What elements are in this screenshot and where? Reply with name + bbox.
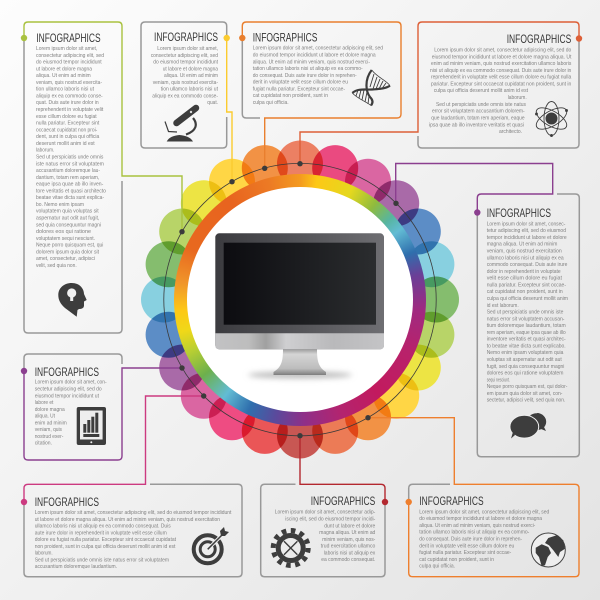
text block (35, 380, 107, 447)
text block: laborum. (35, 551, 53, 557)
monitor shadow (248, 372, 352, 378)
end dot: red-orange (576, 35, 582, 42)
panel: right purple (396, 164, 579, 457)
text block: do eiusmod tempor incididunt ut labore et dolore magna (419, 516, 543, 522)
text block: commodo consequat. Duis aute irure (487, 262, 568, 268)
text block: cat cupidatat non proident, sunt in (419, 557, 494, 563)
text block: to beatae vitae dicta sunt explicabo. (487, 343, 566, 349)
text block: architecto. (499, 129, 522, 135)
end dot: purple (474, 209, 480, 216)
text block: voluptas sit aspernatur aut odit aut (487, 357, 562, 363)
text block: pariatur. Excepteur sint occaecat cupidatat non proident, sunt in (431, 81, 571, 87)
rainbow ring (174, 174, 426, 426)
text block: tempor incididunt ut labore et dolore (487, 235, 567, 241)
text block: quat. (207, 100, 218, 106)
monitor (215, 233, 384, 378)
connector: green (24, 22, 182, 232)
connector: orange (242, 22, 401, 168)
icon: microscope (165, 108, 196, 142)
text block: tation ullamco laboris nisi ut aliquip ex ea commo- (419, 530, 529, 536)
text block (419, 509, 549, 570)
connector: purple (24, 368, 182, 460)
text block: amet, consectetur, adipisci (36, 256, 95, 262)
text block: derit in voluptate velit esse cillum dolore eu (419, 543, 514, 549)
text block: voluptatem quia voluptas sit (36, 209, 99, 215)
panel: bottom-right orange (368, 418, 579, 577)
text block: aliquip ex ea commodo conse- (36, 94, 103, 100)
panel: left purple tablet (21, 354, 182, 460)
text block: iste natus error sit voluptatem (36, 161, 104, 167)
text block: error sit voluptatem accusantium dolorem- (432, 109, 525, 115)
text block: dolores eos qui ratione voluptatem (487, 371, 563, 377)
text block (151, 46, 219, 106)
text block: esse cillum dolore eu fugiat (36, 114, 97, 120)
text block: aliqua. Ut enim ad minim veniam, quis nostrud exerci- (253, 59, 370, 65)
text block: aliqua. Ut enim ad minim veniam, quis nostrud exerci- (419, 523, 535, 529)
text block: Neque porro quisquam est, qui dolor- (487, 384, 567, 390)
heading: INFOGRAPHICS (487, 206, 551, 220)
text block: culpa qui officia. (253, 100, 289, 106)
text block: tion ullamco laboris nisi ut (36, 87, 94, 93)
text block: nisi ut aliquip ex ea commodo consequat. Duis aute irure dolor in (430, 68, 571, 74)
text block: aliqua. Ut (35, 414, 55, 420)
panel: DNA orange (239, 22, 401, 168)
text block: sed quia consequuntur magni (36, 222, 101, 228)
text block: minim veniam, quis nos- (322, 537, 375, 543)
text block: magna aliqua. Ut enim ad (319, 530, 375, 536)
text block: enim ad minim (35, 420, 67, 426)
text block: reprehenderit in voluptate velit esse cillum dolore eu fugiat nulla (431, 75, 572, 81)
text block: velit esse cillum dolore eu fugiat (487, 276, 562, 282)
connector nodes (179, 161, 399, 438)
text block: tetur adipiscing elit, sed do eiusmod (487, 228, 566, 234)
text block: voluptatem sequi nesciunt. (36, 236, 95, 242)
text block: trud exercitation ullamco (321, 544, 376, 550)
text block: natus error sit voluptatem accusan- (487, 316, 564, 322)
text block: eiusmod tempor incididunt ut (35, 393, 99, 399)
text block: Sed ut perspiciatis unde omnis iste natus error sit voluptatem (35, 558, 169, 564)
text block: do eiusmod tempor incididunt (153, 60, 218, 66)
text block: sectetur, adipisci velit, sed quia non. (487, 398, 566, 404)
text block: aliquip ex ea commodo conse- (152, 94, 218, 100)
text block: magna aliqua. Ut enim ad minim (487, 242, 557, 248)
monitor screen (224, 243, 376, 325)
end dot: orange (406, 499, 412, 505)
text block: eiusmod tempor incididunt ut labore et dolore magna aliqua. Ut (432, 54, 572, 60)
text block: sequi nesciunt. (487, 377, 510, 383)
text block: Lorem ipsum dolor sit amet, consec- (487, 221, 565, 227)
text block: Neque porro quisquam est, qui (36, 243, 103, 249)
text block: ipsa quae ab illo inventore veritatis et quasi (429, 122, 524, 128)
end dot: pink (21, 499, 27, 505)
text block: laborum. (36, 148, 55, 154)
text block: non proident, sunt in culpa qui officia deserunt mollit anim id est (35, 544, 176, 550)
text block: dolor in reprehenderit in voluptate (487, 269, 561, 275)
text block: nulla pariatur. Excepteur sint occae- (487, 282, 566, 288)
text block: ut labore et dolore magna (36, 66, 93, 72)
text block: labore et (35, 400, 54, 406)
icon: speech bubbles (510, 413, 546, 438)
text block: do consequat. Duis aute irure dolor in reprehen- (419, 536, 522, 542)
text block: nulla pariatur. Excepteur sint (36, 121, 100, 127)
text block (35, 510, 232, 570)
end dot: orange (239, 35, 246, 41)
text block: em ipsum quia dolor sit amet, con- (487, 391, 562, 397)
text block: cat cupidatat non proident, sunt in (487, 289, 563, 295)
heading: INFOGRAPHICS (419, 494, 484, 508)
heading: INFOGRAPHICS (35, 495, 99, 509)
petal flower (141, 140, 459, 458)
end dot: purple (21, 368, 27, 374)
heading: INFOGRAPHICS (253, 30, 317, 44)
text block: deserunt mollit anim id est (36, 141, 95, 147)
text block: tion ullamco laboris nisi ut (161, 87, 218, 93)
text block: dantium, totam rem aperiam, (36, 175, 100, 181)
end dot: red (382, 499, 388, 505)
text block: Sed ut perspiciatis unde omnis (36, 154, 103, 160)
text block: id est laborum. (487, 303, 519, 309)
connector: pink (24, 396, 204, 502)
text block: citation. (35, 441, 52, 447)
connector: yellow (227, 38, 232, 182)
text block: tium doloremque laudantium, totam (487, 323, 566, 329)
icon: target with arrow (194, 527, 229, 563)
text block: que laudantium, totam rem aperiam, eaque (431, 115, 525, 121)
text block: dolorem ipsum quia dolor sit (36, 249, 99, 255)
icon: DNA helix (352, 70, 390, 106)
text block: dunt ut labore et dolore (324, 523, 376, 529)
text block: accusantium doloremque laudantium. (35, 564, 117, 570)
panel: top-left green (21, 22, 182, 333)
icon: head with light bulb (58, 283, 87, 317)
text block: reprehenderit in voluptate velit (36, 107, 104, 113)
text block: velit, sed quia non. (36, 263, 77, 269)
text block: sectetur adipiscing elit, sed do (35, 386, 102, 392)
text block (36, 46, 107, 269)
text block: Nemo enim ipsam voluptatem quia (487, 350, 564, 356)
text block: cat cupidatat non proident, sunt in (253, 93, 328, 99)
icon: tablet with bar chart (77, 407, 106, 445)
text block: culpa qui officia deserunt mollit anim (487, 296, 568, 302)
heading: INFOGRAPHICS (36, 31, 101, 45)
text block: nostrud exer- (35, 434, 63, 440)
heading: INFOGRAPHICS (311, 494, 375, 508)
text block: veniam, quis nostrud exercita- (153, 80, 218, 86)
connector: purple (396, 164, 553, 212)
text block: dolore eu fugiat nulla pariatur. Excepteur sint occaecat cupidatat (35, 537, 176, 543)
text block: Lorem ipsum dolor sit amet, consectetur adipiscing elit, sed (419, 509, 549, 515)
heading: INFOGRAPHICS (35, 365, 99, 379)
text block: fugit, sed quia consequuntur magni (487, 364, 564, 370)
thin orbit circle (164, 163, 436, 436)
text block: Lorem ipsum dolor sit amet, consectetur adipiscing elit, sed (253, 46, 383, 52)
text block: Sed ut perspiciatis unde omnis iste (487, 310, 564, 316)
text block: Lorem ipsum dolor sit amet, consectetur adipiscing elit, sed do (434, 48, 572, 54)
heading: INFOGRAPHICS (154, 30, 218, 44)
text block: beatae vitae dicta sunt explica- (36, 195, 104, 201)
text block: enim ad minim veniam, quis nostrud exercitation ullamco laboris (431, 61, 571, 67)
text block: dent, sunt in culpa qui officia (36, 134, 100, 140)
monitor stand (274, 349, 326, 375)
text block: occaecat cupidatat non proi- (36, 127, 97, 133)
panel: microscope yellow (141, 22, 232, 182)
text block: tation ullamco laboris nisi ut aliquip ex ea commo- (253, 66, 363, 72)
text block: consectetur adipiscing elit, sed (151, 53, 218, 59)
text block: derit in voluptate velit esse cillum dolore eu (253, 80, 348, 86)
text block: veniam, quis nostrud exercita- (36, 80, 102, 86)
text block: Sed ut perspiciatis unde omnis iste natus (436, 102, 526, 108)
text block (253, 46, 383, 106)
text block: fugiat nulla pariatur. Excepteur sint occae- (253, 86, 345, 92)
text block: fugiat nulla pariatur. Excepteur sint occae- (419, 550, 511, 556)
text block: veniam, quis (35, 427, 62, 433)
text block: do consequat. Duis aute irure dolor in reprehen- (253, 73, 357, 79)
icon: gear (273, 530, 308, 566)
icon: atom (533, 102, 570, 136)
text block: Lorem ipsum dolor sit amet, con- (35, 380, 107, 386)
text block (487, 221, 568, 404)
text block: culpa qui officia deserunt mollit anim id est (434, 88, 528, 94)
connector: red-orange (300, 22, 579, 164)
text block (429, 48, 572, 135)
text block: tore veritatis et quasi architecto (36, 188, 107, 194)
text block: laborum. (508, 95, 527, 101)
monitor chin (215, 333, 384, 349)
heading: INFOGRAPHICS (507, 32, 571, 46)
text block: rem aperiam, eaque ipsa quae ab illo (487, 330, 566, 336)
monitor body (215, 233, 384, 349)
panel: bottom-left pink (21, 396, 242, 577)
text block: veniam, quis nostrud exercitation (487, 248, 562, 254)
text block: ea commodo consequat. (321, 557, 376, 563)
text block: iscing elit, sed do eiusmod tempor incidi- (285, 516, 375, 522)
text block: aliqua. Ut enim ad minim (164, 73, 218, 79)
text block: dolores eos qui ratione (36, 229, 92, 235)
text block: Lorem ipsum dolor sit amet, (36, 46, 98, 52)
text block: dolore magna (35, 407, 65, 413)
white centre disc (187, 187, 413, 412)
text block: ullamco laboris nisi ut aliquip ex ea commodo consequat. Duis (35, 524, 171, 530)
connector: red (300, 436, 385, 502)
text block (275, 510, 376, 563)
text block: consectetur adipiscing elit, sed (36, 53, 104, 59)
text block: accusantium doloremque lau- (36, 168, 100, 174)
text block: culpa qui officia. (419, 564, 455, 570)
text block: bo. Nemo enim ipsam (36, 202, 84, 208)
text block: ut labore et dolore magna (163, 66, 219, 72)
text block: ullamco laboris nisi ut aliquip ex ea (487, 255, 564, 261)
text block: eaque ipsa quae ab illo inven- (36, 182, 103, 188)
text block: do eiusmod tempor incididunt ut labore et dolore magna (253, 52, 376, 58)
panel: atom red-orange (300, 22, 582, 164)
end dot: yellow (224, 35, 230, 41)
panel: bottom-centre red (261, 436, 388, 577)
text block: Lorem ipsum dolor sit amet, (157, 46, 218, 52)
text block: ut labore et dolore magna aliqua. Ut enim ad minim veniam, quis nostrud exercitation (35, 517, 220, 523)
text block: aspernatur aut odit aut fugit, (36, 216, 100, 222)
text block: do eiusmod tempor incididunt (36, 60, 102, 66)
connector: orange (368, 418, 579, 577)
end dot: green (21, 35, 27, 41)
text block: inventore veritatis et quasi architec- (487, 337, 566, 343)
text block: Lorem ipsum dolor sit amet, consectetur adipiscing elit, sed do eiusmod tempor incididunt (35, 510, 232, 516)
text block: quat. Duis aute irure dolor in (36, 100, 99, 106)
text block: laboris nisi ut aliquip ex (324, 550, 375, 556)
text block: aliqua. Ut enim ad minim (36, 73, 91, 79)
text block: Lorem ipsum dolor sit amet, consectetur adip- (275, 510, 375, 516)
text block: aute irure dolor in reprehenderit in voluptate velit esse cillum (35, 530, 167, 536)
icon: globe (531, 533, 565, 567)
